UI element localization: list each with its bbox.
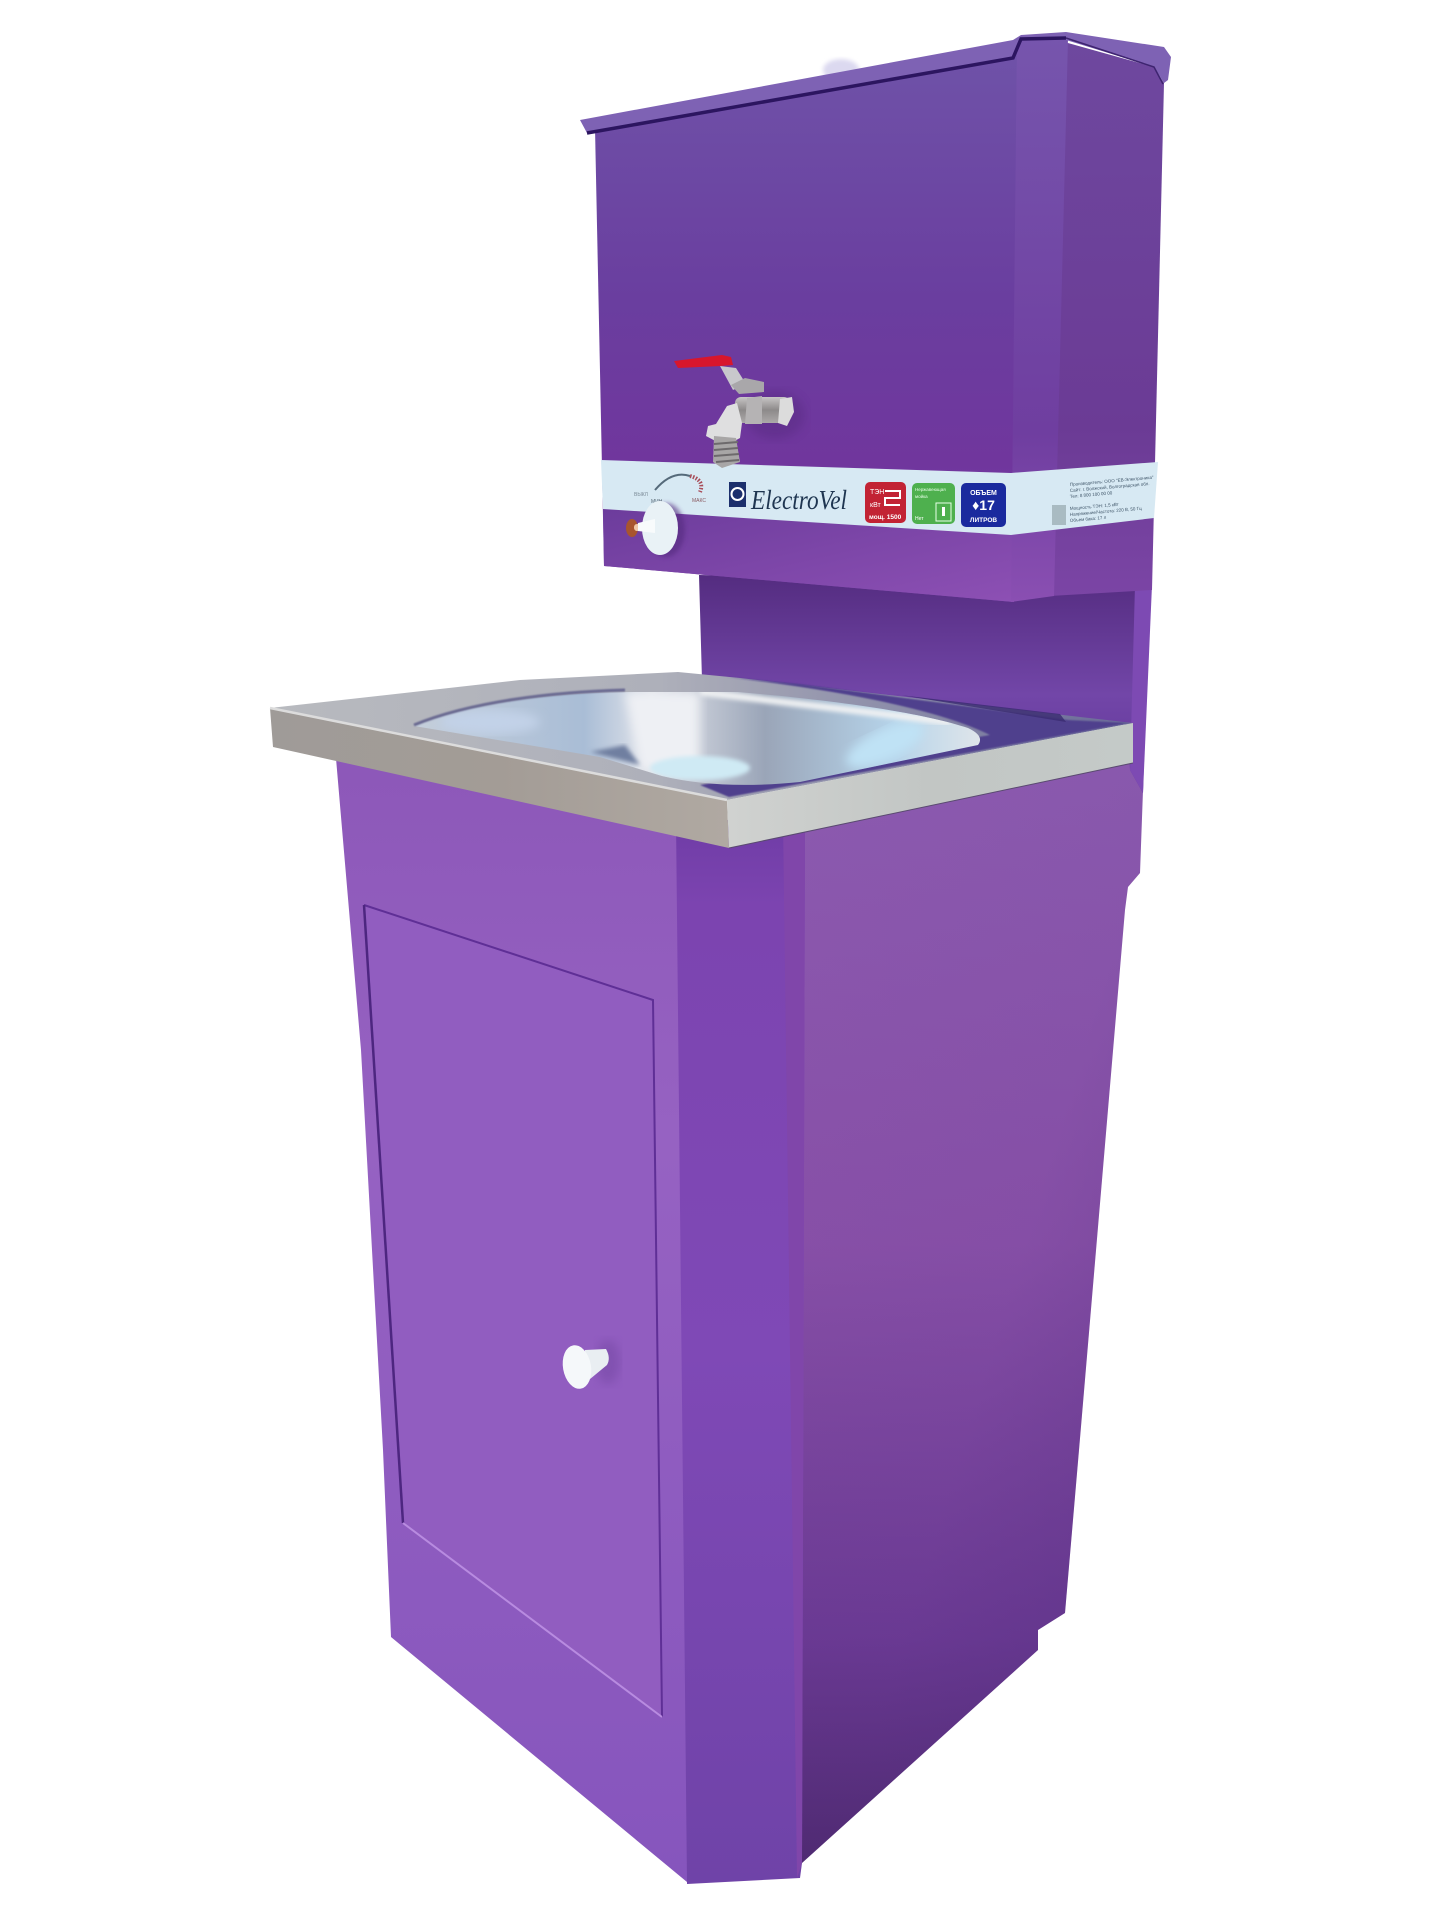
cabinet front panel	[334, 735, 690, 1882]
logo: ElectroVel	[750, 485, 847, 515]
illustration: purple washstand with heated water tank	[270, 32, 1171, 1884]
green badge: мойка	[915, 493, 928, 499]
manufacturer fine print: Напряжение/Частота: 220 В, 50 Гц	[1070, 506, 1142, 517]
manufacturer fine print: Мощность ТЭН: 1,5 кВт	[1070, 502, 1119, 511]
manufacturer fine print: Сайт: г. Волжский, Волгоградская обл.	[1070, 480, 1150, 493]
tank right side	[1050, 38, 1164, 596]
counter right edge	[727, 723, 1133, 848]
door knob	[559, 1340, 620, 1391]
label band	[601, 460, 1158, 535]
QR code	[1052, 505, 1066, 525]
purple reflection on counter	[700, 677, 1128, 797]
red power badge: кВт	[870, 502, 881, 509]
sink bowl	[414, 690, 980, 785]
blue volume badge: ♦17	[972, 497, 995, 513]
heat gauge: ВЫКЛ	[634, 492, 648, 498]
door	[364, 905, 662, 1717]
heat gauge: МАКС	[692, 498, 706, 504]
tank corner	[1011, 38, 1068, 602]
manufacturer fine print	[1070, 475, 1154, 523]
logo	[729, 482, 847, 515]
spout	[706, 403, 742, 446]
blue volume badge	[961, 483, 1006, 527]
tank lid	[580, 32, 1171, 133]
manufacturer fine print: Тел: 8 800 100 00 00	[1070, 490, 1113, 499]
temperature knob	[626, 501, 685, 557]
cabinet corner column	[676, 820, 805, 1884]
counter top	[270, 672, 1133, 800]
bowl dark rim	[414, 690, 625, 725]
manufacturer fine print: Объем бака: 17 л	[1070, 515, 1107, 523]
water tap	[674, 355, 805, 468]
back panel	[699, 575, 1152, 793]
sink counter	[270, 672, 1133, 848]
water tank	[580, 32, 1171, 602]
cabinet	[334, 735, 1145, 1884]
heat gauge	[634, 475, 706, 505]
manufacturer fine print: Производитель: ООО "ЕВ-Электроника"	[1070, 475, 1154, 487]
valve stem	[720, 366, 746, 390]
red handle	[674, 355, 733, 368]
red power badge: мощ. 1500	[869, 514, 902, 521]
red power badge	[865, 482, 906, 523]
green badge: Нержавеющая	[915, 487, 946, 492]
green badge	[912, 483, 955, 524]
heat gauge: МИН	[651, 499, 663, 505]
green badge: Нет	[915, 516, 924, 522]
tap body	[735, 397, 790, 423]
tap shadow	[745, 391, 805, 439]
tank front	[595, 52, 1020, 602]
cabinet right side	[800, 735, 1145, 1863]
blue volume badge: ОБЪЕМ	[970, 490, 997, 497]
red power badge: ТЭН	[870, 489, 884, 496]
blue volume badge: ЛИТРОВ	[970, 517, 997, 524]
counter left edge	[270, 708, 729, 848]
white object behind lid	[823, 59, 859, 81]
